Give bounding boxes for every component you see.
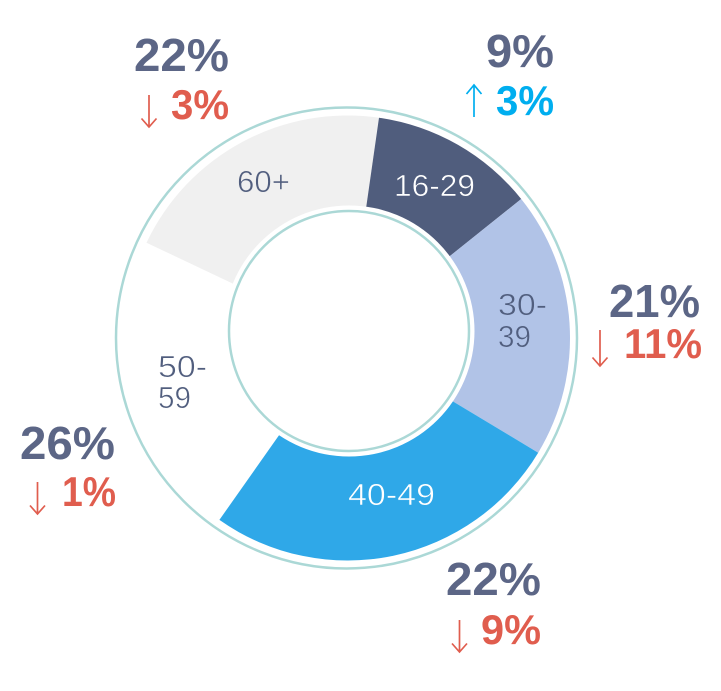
- callout: 60+ 22% down 3%: 22%: [134, 29, 229, 81]
- label: 40-49: 40-49: [348, 478, 435, 512]
- callout: 30-39 21% down 11%: [592, 275, 702, 367]
- label: 30-39: [498, 288, 547, 354]
- callout: 50-59 26% down 1%: 26%: [20, 417, 115, 469]
- segment: 40-49: [219, 338, 538, 561]
- arrow: down: [30, 482, 45, 514]
- label: 30-39: 39: [498, 320, 531, 354]
- inner ring: [229, 211, 469, 451]
- callout: 16-29 9% up 3%: 9%: [486, 25, 554, 77]
- arrow: down: [142, 95, 156, 127]
- label: 50-59: [158, 350, 207, 415]
- callout: 60+ 22% down 3%: [134, 29, 229, 128]
- arrow: down: [452, 620, 467, 652]
- segment: 30-39: [348, 199, 570, 453]
- label: 50-59: 50-: [158, 350, 207, 384]
- callout: 40-49 22% down 9%: 9%: [481, 606, 541, 653]
- callout: 60+ 22% down 3%: 3%: [171, 81, 229, 128]
- label: 16-29: 16-29: [394, 169, 475, 203]
- donut chart: [116, 108, 577, 568]
- callout: 50-59 26% down 1%: [20, 417, 116, 515]
- label: 30-39: 30-: [498, 288, 547, 322]
- callout: 50-59 26% down 1%: 1%: [62, 468, 116, 515]
- segment: 16-29: [348, 118, 521, 338]
- callout: 30-39 21% down 11%: 11%: [624, 320, 702, 367]
- callout: 30-39 21% down 11%: 21%: [609, 275, 700, 327]
- callout: 40-49 22% down 9%: 22%: [446, 553, 541, 605]
- label: 50-59: 59: [158, 381, 191, 415]
- centre hole: [224, 206, 474, 456]
- arrow: up: [466, 85, 482, 117]
- callout: 16-29 9% up 3%: 3%: [496, 77, 554, 124]
- label: 60+: 60+: [237, 165, 290, 199]
- callout: 16-29 9% up 3%: [466, 25, 554, 124]
- outer ring: [116, 108, 577, 568]
- arrow: down: [592, 330, 608, 366]
- callout: 40-49 22% down 9%: [446, 553, 541, 653]
- segment: 60+: [146, 115, 379, 338]
